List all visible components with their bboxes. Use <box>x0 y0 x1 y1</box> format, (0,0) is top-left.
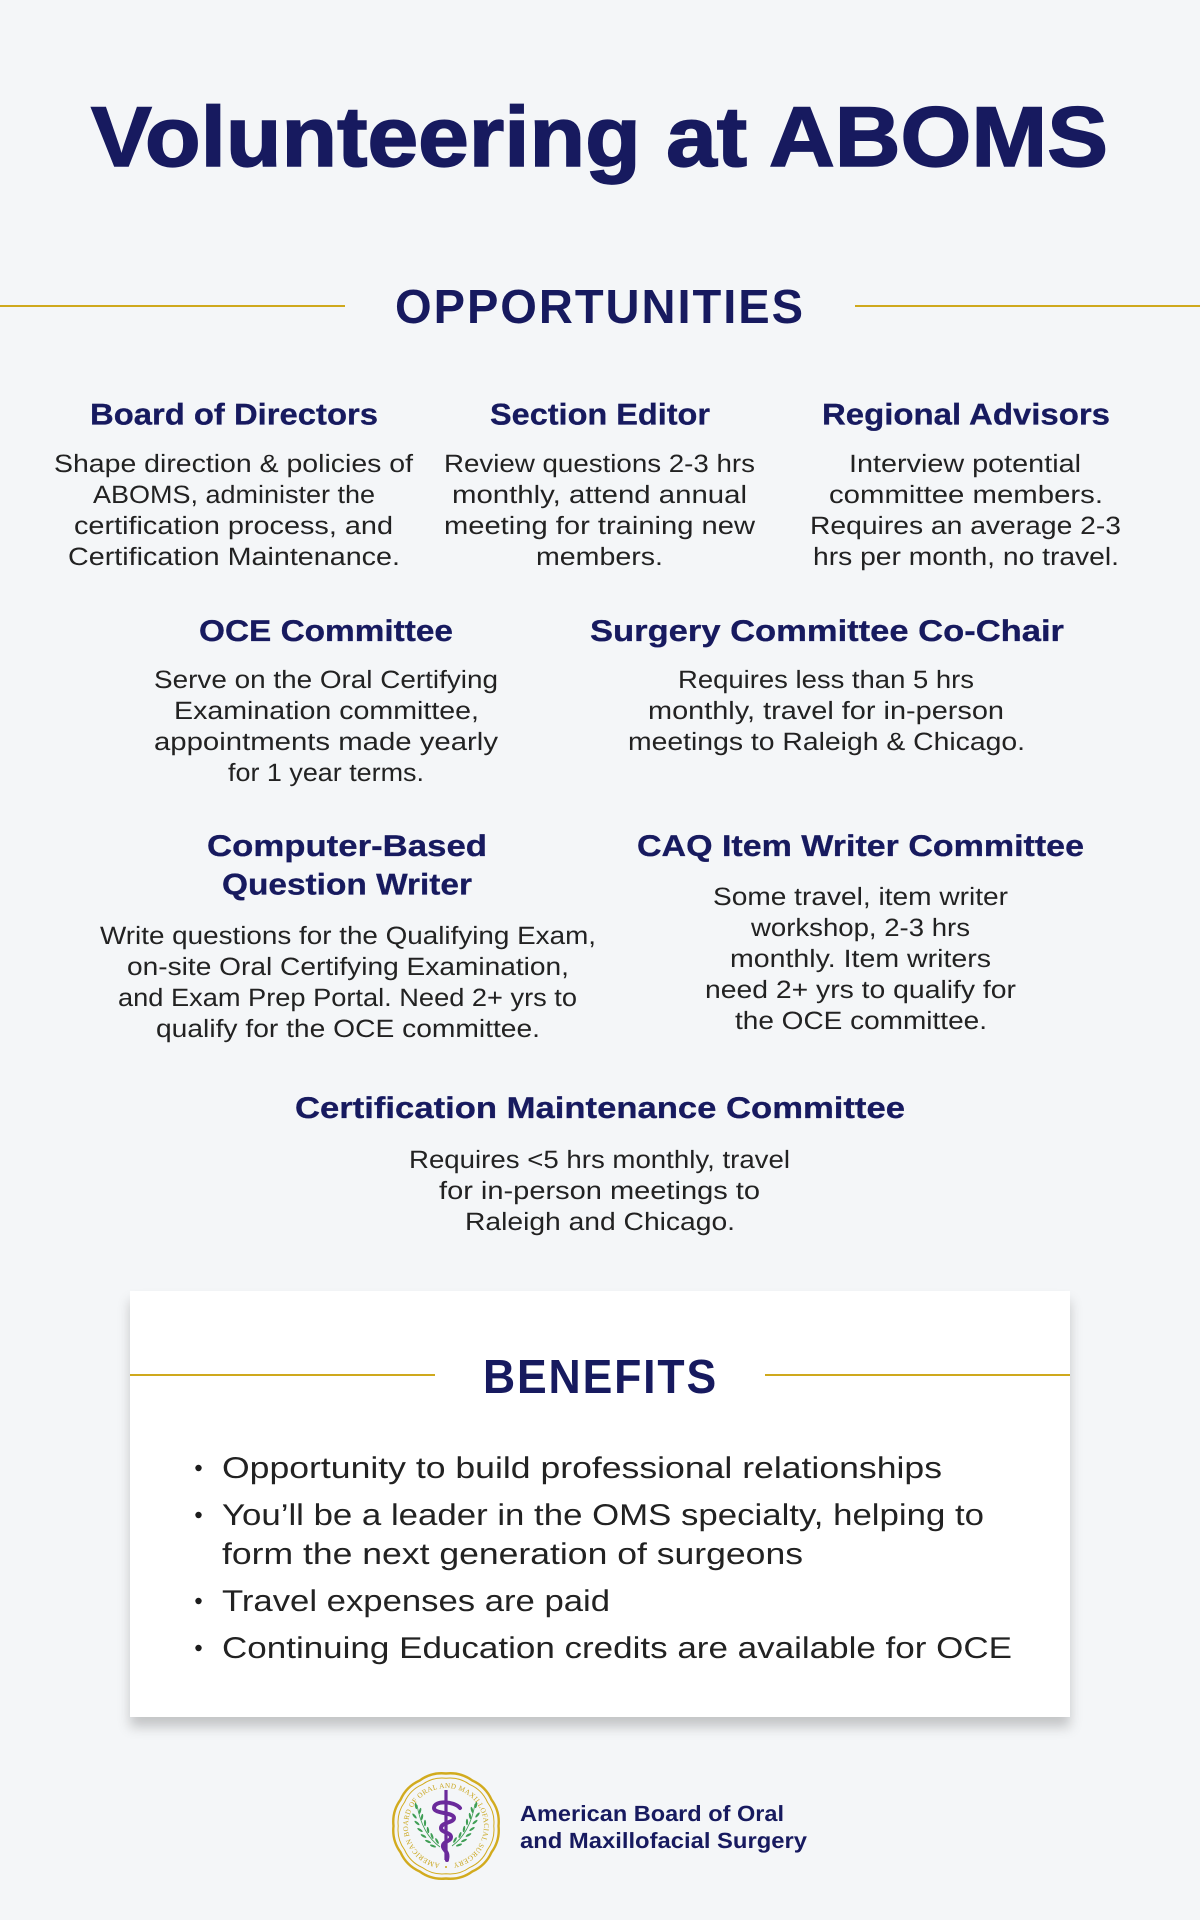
panel: board of directors: certification process, and <box>74 512 393 540</box>
panel: computer-based question writer: Question Writer <box>222 868 472 902</box>
panel: board of directors: Board of Directors <box>90 398 378 432</box>
title: Volunteering at ABOMS <box>91 90 1108 185</box>
panel: regional advisors: committee members. <box>829 481 1103 509</box>
panel: certification maintenance committee: Certification Maintenance Committee <box>295 1092 905 1125</box>
panel: regional advisors: Requires an average 2-3 <box>810 512 1121 540</box>
organization name: American Board of Oral <box>520 1801 784 1826</box>
panel: computer-based question writer: Write questions for the Qualifying Exam, <box>100 922 596 950</box>
panel: section editor: Review questions 2-3 hrs <box>444 450 755 478</box>
icon: left laurel <box>412 1803 440 1848</box>
panel: oce committee: appointments made yearly <box>154 728 499 756</box>
benefits list: Travel expenses are paid <box>222 1585 610 1618</box>
panel: oce committee: OCE Committee <box>199 615 453 648</box>
panel: computer-based question writer: Computer-Based <box>207 830 487 863</box>
panel: certification maintenance committee: Requires <5 hrs monthly, travel <box>409 1146 790 1174</box>
panel: caq item writer committee: need 2+ yrs to qualify for <box>705 976 1016 1004</box>
heading: benefits: BENEFITS <box>483 1351 718 1404</box>
benefits list: Continuing Education credits are available for OCE <box>222 1632 1012 1665</box>
icon: abvms seal logo <box>392 1772 500 1880</box>
panel: surgery committee co-chair <box>590 615 1064 756</box>
benefits list: form the next generation of surgeons <box>222 1538 803 1571</box>
panel: caq item writer committee: workshop, 2-3 hrs <box>750 914 970 942</box>
panel: computer-based question writer: on-site Oral Certifying Examination, <box>127 953 569 981</box>
panel: section editor: members. <box>536 543 663 571</box>
panel: board of directors: ABOMS, administer the <box>93 481 375 509</box>
panel: benefits <box>130 1291 1070 1717</box>
icon: abvms seal logo: AMERICAN BOARD OF ORAL AND MAXILLOFACIAL SURGERY <box>403 1783 489 1868</box>
panel: surgery committee co-chair: monthly, travel for in-person <box>648 697 1004 725</box>
panel: computer-based question writer: and Exam Prep Portal. Need 2+ yrs to <box>118 984 577 1012</box>
benefits list: Opportunity to build professional relationships <box>222 1452 942 1485</box>
panel: caq item writer committee: Some travel, item writer <box>713 883 1008 911</box>
panel: certification maintenance committee <box>295 1092 905 1236</box>
panel: section editor: monthly, attend annual <box>452 481 747 509</box>
panel: computer-based question writer <box>100 830 596 1043</box>
panel: certification maintenance committee: Raleigh and Chicago. <box>465 1208 735 1236</box>
panel: oce committee: for 1 year terms. <box>228 759 424 787</box>
panel: caq item writer committee <box>637 830 1084 1035</box>
panel: regional advisors: Regional Advisors <box>822 398 1110 432</box>
panel: section editor: meeting for training new <box>444 512 756 540</box>
panel: caq item writer committee: monthly. Item writers <box>730 945 991 973</box>
panel: regional advisors: Interview potential <box>849 450 1081 478</box>
panel: surgery committee co-chair: Requires less than 5 hrs <box>678 666 974 694</box>
panel: surgery committee co-chair: Surgery Committee Co-Chair <box>590 615 1064 648</box>
panel: surgery committee co-chair: meetings to Raleigh & Chicago. <box>628 728 1025 756</box>
icon: right laurel <box>452 1802 480 1847</box>
panel: computer-based question writer: qualify for the OCE committee. <box>156 1015 540 1043</box>
panel: regional advisors: hrs per month, no travel. <box>813 543 1119 571</box>
organization name: and Maxillofacial Surgery <box>520 1828 808 1853</box>
panel: oce committee: Serve on the Oral Certifying <box>154 666 498 694</box>
organization name <box>520 1801 808 1853</box>
panel: board of directors <box>54 398 413 571</box>
panel: caq item writer committee: the OCE committee. <box>735 1007 987 1035</box>
panel: board of directors: Certification Maintenance. <box>68 543 400 571</box>
panel: oce committee: Examination committee, <box>174 697 479 725</box>
panel: section editor <box>444 398 756 571</box>
panel: board of directors: Shape direction & policies of <box>54 450 413 478</box>
panel: section editor: Section Editor <box>490 398 710 432</box>
panel: oce committee <box>154 615 499 787</box>
benefits list: You’ll be a leader in the OMS specialty, helping to <box>222 1499 984 1532</box>
panel: regional advisors <box>810 398 1121 571</box>
benefits list <box>195 1452 1012 1665</box>
heading: opportunities: OPPORTUNITIES <box>395 281 805 334</box>
panel: certification maintenance committee: for in-person meetings to <box>439 1177 760 1205</box>
panel: caq item writer committee: CAQ Item Writer Committee <box>637 830 1084 863</box>
